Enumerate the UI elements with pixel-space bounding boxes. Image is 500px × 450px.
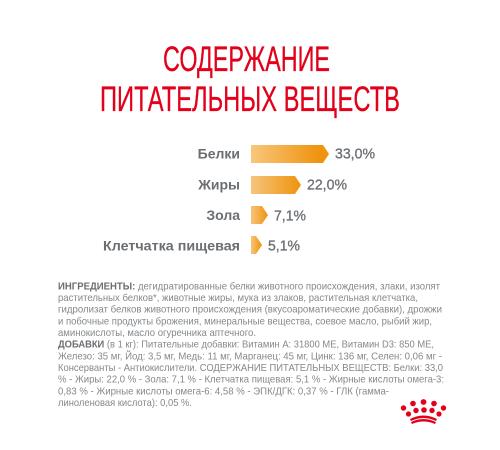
row: Клетчатка пищевая xyxy=(103,236,300,254)
ingredients text block: Консерванты - Антиокислители. СОДЕРЖАНИЕ ПИТАТЕЛЬНЫХ ВЕЩЕСТВ: Белки: 33,0 xyxy=(58,362,443,374)
row: Зола: Зола xyxy=(206,207,240,223)
title: СОДЕРЖАНИЕ xyxy=(163,40,330,79)
ingredients text block: 0,83 % - Жирные кислоты омега-6: 4,58 % - ЭПК/ДГК: 0,37 % - ГЛК (гамма- xyxy=(58,385,389,397)
bar chart xyxy=(103,145,375,254)
ingredients text block: ДОБАВКИ (в 1 кг): Питательные добавки: Витамин А: 31800 МЕ, Витамин D3: 850 МЕ, xyxy=(58,339,434,351)
icon: Royal Canin crown logo xyxy=(401,399,446,424)
row: Жиры xyxy=(197,176,347,194)
ingredients text block xyxy=(58,280,444,409)
ingredients text block: ИНГРЕДИЕНТЫ: дегидратированные белки животного происхождения, злаки, изолят xyxy=(58,280,440,292)
ingredients text block: растительных белков*, животные жиры, мука из злаков, растительная клетчатка, xyxy=(58,292,418,304)
row: Жиры: 22,0% xyxy=(307,178,347,194)
row: Белки: 33,0% xyxy=(335,146,375,162)
ingredients text block: гидролизат белков животного происхождения (вкусоароматические добавки), дрожжи xyxy=(58,304,442,316)
title xyxy=(100,40,400,119)
row: Белки xyxy=(198,145,375,163)
ingredients text block: аминокислоты, масло огуречника аптечного. xyxy=(58,327,256,339)
row: Белки: Белки xyxy=(198,146,240,162)
ingredients text block: линоленовая кислота): 0,05 %. xyxy=(58,397,192,409)
ingredients text block: Железо: 35 мг, Йод: 3,5 мг, Медь: 11 мг, Марганец: 45 мг, Цинк: 136 мг, Селен: 0,06 мг - xyxy=(58,349,442,362)
row: Клетчатка пищевая: 5,1% xyxy=(268,238,300,254)
ingredients text block: и побочные продукты брожения, минеральные вещества, соевое масло, рыбий жир, xyxy=(58,315,432,327)
row: Клетчатка пищевая: Клетчатка пищевая xyxy=(103,238,240,254)
row: Зола: 7,1% xyxy=(274,208,306,224)
row: Зола xyxy=(206,206,306,224)
row: Жиры: Жиры xyxy=(197,176,240,192)
ingredients text block: % - Жиры: 22,0 % - Зола: 7,1 % - Клетчатка пищевая: 5,1 % - Жирные кислоты омега-3: xyxy=(58,374,444,386)
